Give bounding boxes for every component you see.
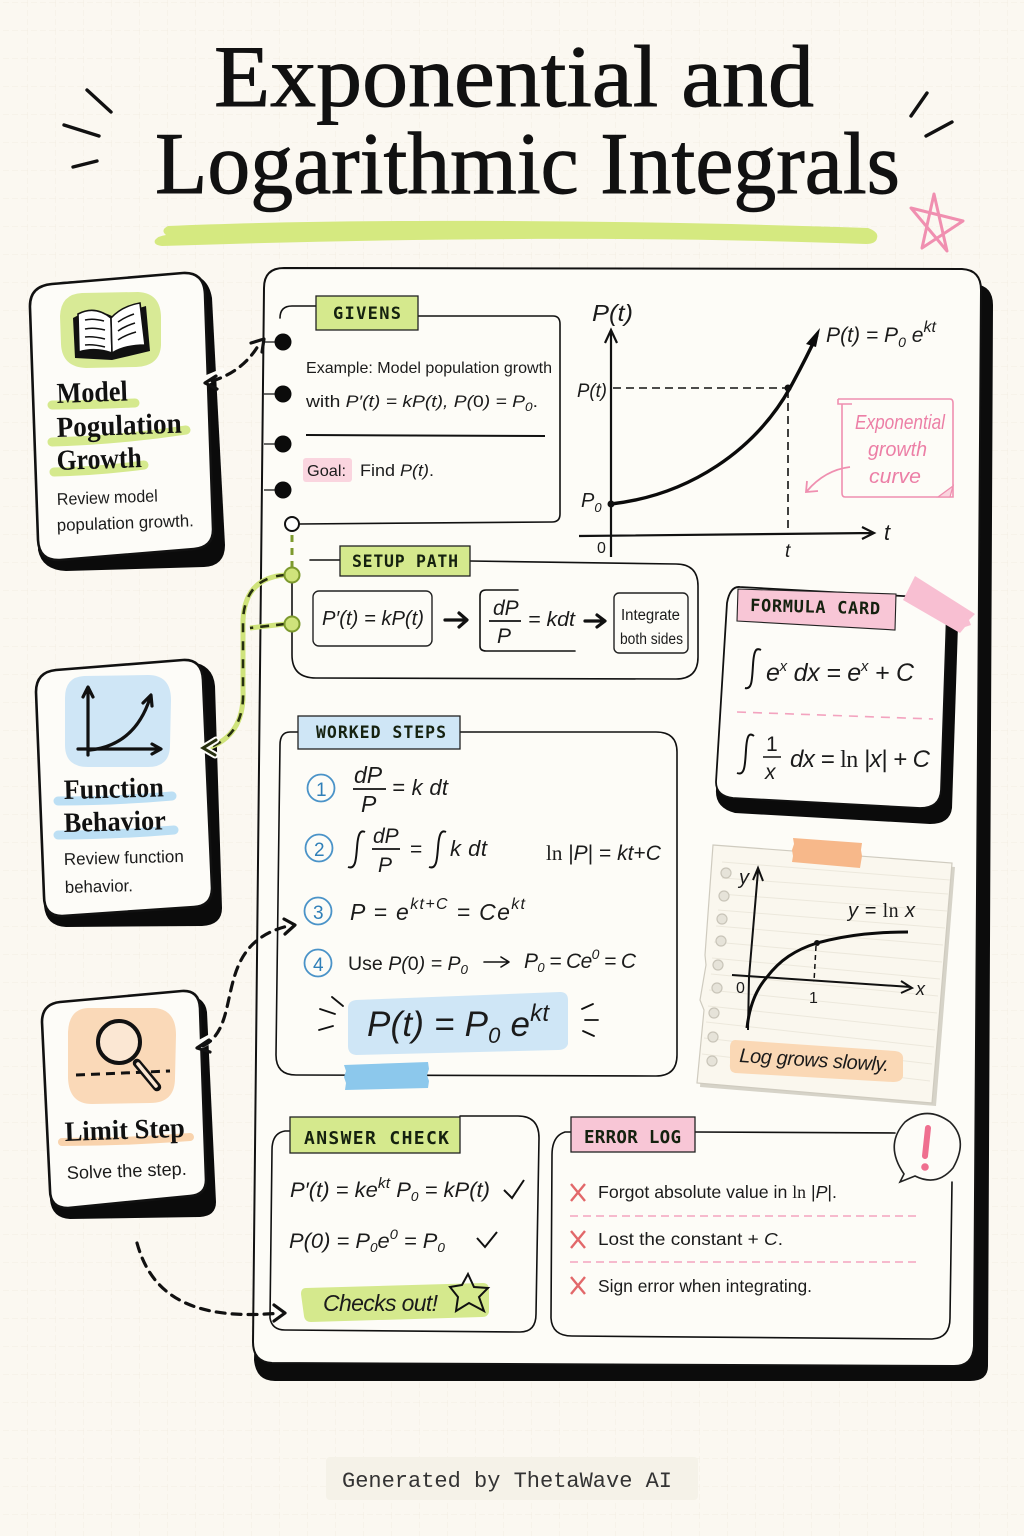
- step box: integrate: both sides: [620, 631, 683, 648]
- decorative burst strokes right: [911, 93, 952, 136]
- step 2: ln |P| = kt+C: [546, 841, 662, 865]
- tag: givens: [316, 296, 418, 330]
- axis labels: P: [581, 490, 594, 512]
- error item 1: Forgot absolute value in ln |P|.: [598, 1182, 837, 1202]
- goal text: [303, 458, 434, 482]
- check line 2: 0: [370, 1240, 378, 1255]
- footer: [326, 1457, 698, 1500]
- step 2: dP: [373, 825, 399, 848]
- example text: 0: [525, 400, 533, 414]
- panel: formula card: [716, 576, 975, 824]
- caption highlight: [730, 1040, 903, 1082]
- step box: differential equation: [313, 591, 432, 646]
- tag: answer check: ANSWER CHECK: [304, 1128, 449, 1149]
- tag: worked steps: [298, 716, 460, 749]
- formula: exp integral: x: [860, 658, 869, 675]
- step 3: [304, 896, 526, 925]
- icon: pink star: [911, 194, 963, 251]
- heading: Function Behavior: [58, 772, 174, 839]
- formula: exp integral: + C: [868, 659, 915, 687]
- example text: [305, 360, 552, 414]
- check line 1: P: [390, 1179, 411, 1202]
- formula: exp integral: [745, 649, 915, 688]
- formula: exp integral: x: [779, 658, 788, 675]
- card description: [64, 847, 184, 897]
- icon: growth chart: [65, 675, 171, 767]
- formula: reciprocal integral: x: [764, 761, 777, 784]
- check line 1: [290, 1175, 524, 1204]
- error item 2: Lost the constant + C.: [598, 1229, 783, 1249]
- axis labels: P(t) = P: [826, 324, 898, 347]
- arrow: [445, 613, 467, 627]
- heading: Model Population Growth: [52, 376, 186, 477]
- example text: with P′(t) = kP(t), P( 0) = P: [306, 392, 520, 411]
- step 2: [306, 825, 662, 877]
- check line 1: P′(t) = ke: [290, 1179, 374, 1202]
- burst strokes: [319, 997, 598, 1036]
- icon: open book: [60, 292, 161, 368]
- step box: separated: [480, 590, 577, 651]
- tape: blue: [344, 1062, 429, 1090]
- axis labels: P(t): [592, 300, 633, 326]
- step box: separated: dP: [493, 597, 519, 620]
- axis labels: 0: [594, 500, 602, 515]
- title: Exponential and: [214, 29, 814, 126]
- step 4: [304, 946, 637, 977]
- step 4: P: [524, 950, 538, 973]
- title: Logarithmic Integrals: [155, 116, 900, 213]
- check line 2: [289, 1226, 497, 1255]
- step 4: 0: [461, 962, 469, 977]
- step 3: kt+C: [410, 896, 448, 913]
- step 3: kt: [511, 896, 526, 913]
- tag: setup path: [340, 546, 470, 576]
- check line 2: P(0) = P: [289, 1230, 367, 1253]
- caption highlight: Log grows slowly.: [739, 1045, 890, 1076]
- axis labels: P(t): [577, 381, 607, 402]
- note: exponential growth curve: Exponential: [855, 412, 945, 434]
- step 1: dP: [354, 762, 383, 788]
- step box: integrate: [614, 593, 688, 653]
- title highlight underline: [155, 221, 877, 246]
- heading: Limit Step: Limit Step: [64, 1113, 185, 1148]
- panel: error log: [551, 1114, 960, 1339]
- heading: Model Population Growth: Pogulation: [56, 408, 182, 444]
- tag: answer check: [290, 1117, 460, 1153]
- tag: givens: GIVENS: [333, 304, 401, 324]
- ruled lines: [702, 862, 950, 1081]
- card: limit step: [42, 991, 216, 1219]
- arrow: book card to givens: [205, 339, 264, 389]
- graph labels: 0: [736, 980, 745, 997]
- example text: Example: Model population growth: [306, 360, 552, 377]
- panel: setup path: [203, 517, 698, 755]
- result highlight: e: [501, 1005, 530, 1044]
- example text: .: [533, 392, 538, 411]
- check line 1: = kP(t): [418, 1179, 490, 1202]
- tape: orange: [792, 838, 862, 868]
- panel: givens: [264, 296, 560, 524]
- footer: Generated by ThetaWave AI: [342, 1469, 672, 1494]
- formula: exp integral: dx = e: [787, 659, 861, 687]
- icon: star: [450, 1274, 488, 1311]
- check line 2: 0: [437, 1240, 446, 1255]
- axes: [748, 868, 763, 1030]
- chart: exponential growth: [577, 300, 937, 562]
- result highlight: kt: [530, 1000, 550, 1027]
- goal text: Find P(t).: [360, 461, 434, 480]
- note: exponential growth curve: [806, 399, 953, 497]
- main panel: [253, 268, 993, 1381]
- heading: Model Population Growth: Model: [56, 376, 128, 410]
- icon: magnifying glass on limit line: [68, 1008, 176, 1104]
- tag: worked steps: WORKED STEPS: [316, 723, 446, 742]
- step 2: 2: [314, 840, 325, 861]
- growth curve: [611, 335, 817, 504]
- guide lines: [613, 388, 788, 534]
- axis labels: t: [884, 520, 891, 545]
- formula: reciprocal integral: 1: [766, 733, 778, 756]
- graph labels: y = ln x: [846, 900, 916, 922]
- binder dots: [264, 334, 292, 498]
- graph labels: 1: [809, 990, 818, 1007]
- binder holes: [707, 868, 731, 1066]
- step 4: = Ce: [544, 950, 592, 973]
- arrow: [585, 615, 605, 627]
- graph labels: [736, 867, 926, 1007]
- tag: error log: [571, 1117, 695, 1152]
- note: exponential growth curve: growth: [868, 439, 927, 461]
- card description: Review function: [64, 847, 184, 869]
- step box: differential equation: P′(t) = kP(t): [322, 608, 424, 630]
- step 3: 3: [313, 903, 324, 924]
- check line 1: kt: [378, 1175, 391, 1192]
- step 1: 1: [316, 780, 327, 801]
- step box: separated: P: [497, 625, 511, 648]
- tag: formula card: FORMULA CARD: [750, 596, 880, 619]
- card: model population growth: [30, 273, 225, 571]
- axes: [605, 330, 617, 557]
- axis labels: [577, 300, 937, 562]
- tape: pink: [903, 576, 975, 633]
- step 4: 0: [537, 960, 545, 975]
- goal text: Goal:: [307, 463, 346, 480]
- decorative burst strokes left: [64, 90, 111, 167]
- note: log graph: [697, 838, 955, 1106]
- panel: worked steps: [276, 716, 677, 1090]
- log curve: [747, 932, 908, 1028]
- formula: exp integral: e: [766, 659, 780, 687]
- step 1: [308, 762, 449, 817]
- step 4: Use P(0) = P: [348, 954, 459, 975]
- step 2: P: [378, 854, 392, 877]
- axis labels: t: [785, 541, 791, 562]
- heading: Model Population Growth: Growth: [56, 442, 142, 477]
- step 4: 0: [592, 946, 600, 962]
- tag: formula card: [737, 589, 896, 630]
- arrow: limit step to worked steps: [197, 919, 295, 1052]
- card description: [56, 486, 194, 535]
- formula: reciprocal integral: [737, 733, 931, 784]
- step 4: = C: [599, 950, 637, 973]
- step 1: P: [361, 791, 377, 817]
- axis labels: 0: [597, 540, 606, 557]
- heading: Function Behavior: Behavior: [63, 805, 166, 839]
- step 2: k dt: [450, 836, 488, 861]
- formula: reciprocal integral: dx = ln |x| + C: [790, 746, 931, 773]
- card description: behavior.: [65, 876, 133, 897]
- step box: separated: = kdt: [528, 609, 577, 631]
- check line 2: = P: [398, 1230, 437, 1253]
- panel: answer check: [270, 1116, 539, 1332]
- result highlight: 0: [488, 1023, 501, 1048]
- result highlight: P(t) = P: [367, 1005, 488, 1044]
- result highlight: [348, 992, 568, 1055]
- title: [155, 29, 900, 213]
- axis labels: kt: [923, 319, 937, 336]
- graph labels: x: [915, 979, 926, 999]
- checks out highlight: [301, 1283, 489, 1322]
- graph labels: y: [737, 867, 750, 889]
- step box: integrate: Integrate: [621, 607, 680, 624]
- step 3: = Ce: [449, 899, 510, 925]
- error item 3: Sign error when integrating.: [598, 1276, 812, 1296]
- connector nodes: [203, 517, 300, 755]
- card: function behavior: [36, 660, 222, 927]
- axis labels: 0: [898, 334, 906, 350]
- arrow: limit step to answer check: [137, 1243, 285, 1321]
- step 2: =: [410, 838, 422, 861]
- icon: exclamation speech bubble: [894, 1114, 960, 1182]
- step 3: P = e: [350, 899, 409, 925]
- card description: Solve the step.: [66, 1159, 187, 1183]
- check line 2: 0: [390, 1226, 398, 1242]
- step 4: 4: [313, 955, 324, 976]
- card description: population growth.: [56, 511, 194, 535]
- check line 1: 0: [411, 1189, 419, 1204]
- card description: Review model: [56, 486, 158, 509]
- tag: setup path: SETUP PATH: [352, 552, 458, 571]
- checks out highlight: Checks out!: [323, 1290, 439, 1316]
- check line 2: e: [378, 1230, 390, 1253]
- tag: error log: ERROR LOG: [584, 1128, 681, 1148]
- note: exponential growth curve: curve: [869, 466, 921, 488]
- step 1: = k dt: [392, 775, 449, 800]
- heading: Function Behavior: Function: [63, 772, 165, 806]
- axis labels: e: [906, 324, 923, 347]
